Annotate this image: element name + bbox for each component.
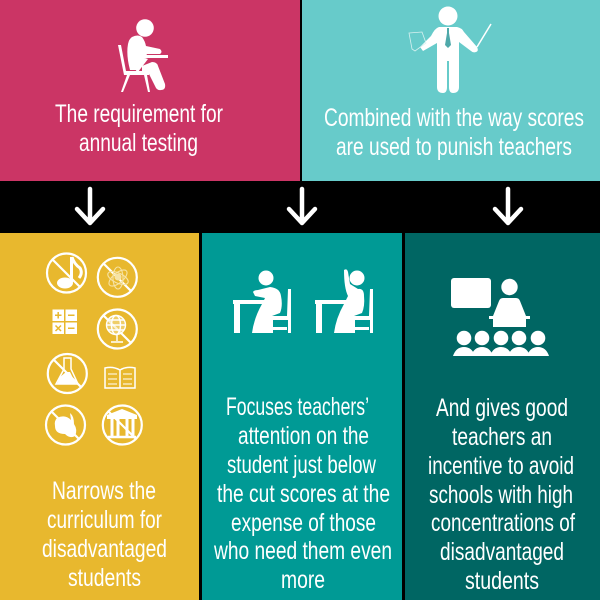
text: focuses attention: Focuses teachers’ bbox=[226, 393, 369, 421]
text: focuses attention bbox=[213, 393, 392, 594]
heading: punish teachers bbox=[324, 104, 584, 161]
text: focuses attention: expense of those bbox=[231, 509, 376, 537]
arrow: left bbox=[77, 189, 103, 223]
text: teacher incentive: teachers an bbox=[452, 423, 552, 451]
panel: annual testing bbox=[0, 0, 300, 181]
panel: teacher incentive bbox=[405, 233, 600, 600]
icon: math symbols bbox=[52, 310, 77, 334]
text: focuses attention: student just below bbox=[227, 451, 377, 479]
text: narrows curriculum bbox=[42, 477, 167, 592]
icon: teacher with pointer bbox=[409, 6, 491, 93]
text: teacher incentive: disadvantaged bbox=[440, 538, 564, 566]
text: teacher incentive bbox=[428, 394, 575, 595]
icon: no art palette bbox=[46, 406, 85, 444]
icon: no globe bbox=[98, 310, 137, 348]
icon: seated student bbox=[233, 270, 291, 333]
icon: no science atom bbox=[98, 258, 137, 297]
icon: student at desk bbox=[118, 19, 168, 92]
icon: no music bbox=[47, 254, 86, 292]
arrow: middle bbox=[289, 189, 315, 223]
text: focuses attention: more bbox=[281, 566, 325, 594]
panel: punish teachers bbox=[302, 0, 600, 181]
panel: narrows curriculum bbox=[0, 233, 199, 600]
text: narrows curriculum: Narrows the bbox=[52, 477, 156, 505]
text: focuses attention: who need them even bbox=[213, 537, 392, 565]
text: narrows curriculum: curriculum for bbox=[47, 506, 162, 534]
text: focuses attention: attention on the bbox=[238, 422, 369, 450]
icon: open book bbox=[105, 367, 135, 388]
text: focuses attention: the cut scores at the bbox=[217, 480, 390, 508]
icon: student raising hand bbox=[315, 269, 373, 333]
heading: annual testing bbox=[55, 100, 223, 157]
arrow: right bbox=[495, 189, 521, 223]
icon: classroom bbox=[451, 278, 549, 356]
text: narrows curriculum: students bbox=[68, 564, 141, 592]
text: teacher incentive: students bbox=[465, 567, 539, 595]
icon: no museum building bbox=[103, 406, 142, 444]
icon: no chemistry flask bbox=[48, 354, 87, 393]
heading: annual testing: The requirement for bbox=[55, 100, 223, 128]
heading: annual testing: annual testing bbox=[79, 129, 198, 157]
panel: focuses attention bbox=[202, 233, 402, 600]
text: narrows curriculum: disadvantaged bbox=[42, 535, 167, 563]
